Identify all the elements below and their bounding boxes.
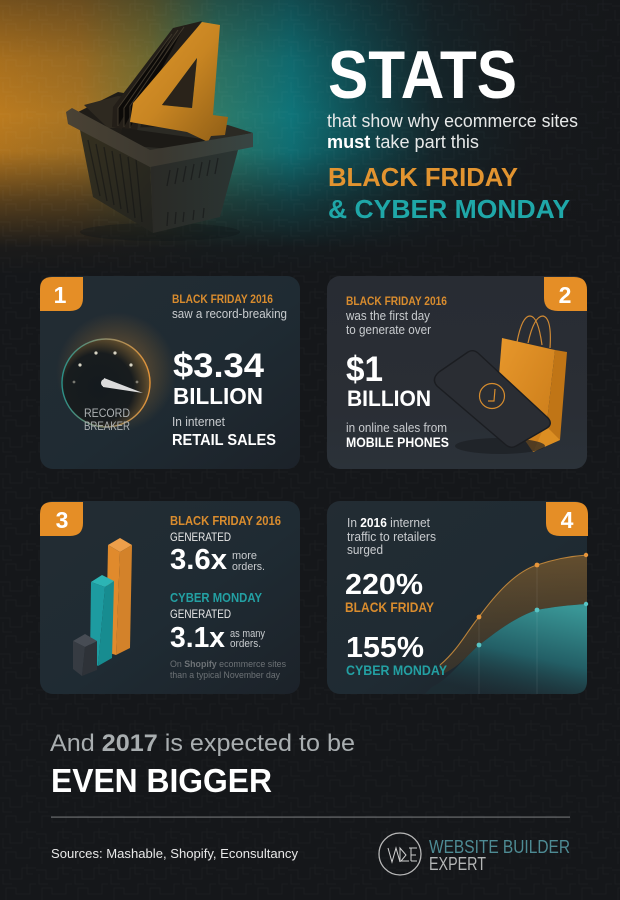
gauge: record breaker: BREAKER (84, 419, 130, 433)
subtitle: that show why ecommerce sites (327, 111, 578, 131)
sources: Sources: Mashable, Shopify, Econsultancy (51, 846, 298, 861)
text block: stat 2 (345, 294, 449, 450)
text block: stat 4: 155% (346, 632, 424, 664)
text block: stat 3: more (232, 550, 257, 562)
text block: stat 3: as many (230, 628, 265, 640)
badge 3 (40, 502, 83, 536)
bar chart (73, 538, 132, 676)
text block: stat 1: RETAIL SALES (172, 432, 276, 449)
logo: website builder expert (379, 833, 570, 875)
text block: stat 1: BILLION (173, 383, 263, 409)
text block: stat 3: GENERATED (170, 607, 231, 621)
badge 4: 4 (561, 507, 574, 533)
text block: stat 2: $1 (346, 350, 383, 389)
panel: stat 3 (40, 501, 300, 694)
closing statement: And 2017 is expected to be (50, 730, 355, 757)
subtitle: must take part this (327, 132, 479, 152)
text block: stat 3: On Shopify ecommerce sites (170, 659, 286, 670)
text block: stat 2: was the first day (345, 308, 430, 323)
text block: stat 1: BLACK FRIDAY 2016 (172, 292, 273, 306)
text block: stat 3: 3.1x (170, 622, 225, 654)
badge 4 (546, 502, 588, 536)
text block: stat 2: to generate over (346, 322, 432, 337)
text block: stat 2: in online sales from (346, 420, 447, 435)
gauge: record breaker (56, 312, 176, 433)
badge 1: 1 (54, 282, 67, 308)
badge 2: 2 (559, 282, 571, 308)
logo: website builder expert: EXPERT (429, 854, 486, 874)
heading: cyber monday: & CYBER MONDAY (328, 194, 570, 224)
text block: stat 3: orders. (230, 638, 261, 650)
text block: stat 1: saw a record-breaking (172, 306, 287, 321)
illustration: shopping bag and phone (434, 316, 567, 454)
panel: stat 4 (327, 501, 588, 694)
illustration: shopping basket with number 4 (66, 21, 253, 241)
text block: stat 3: orders. (232, 561, 265, 573)
text block: stat 4: traffic to retailers (347, 529, 436, 544)
gauge: record breaker: RECORD (84, 406, 130, 420)
text block: stat 4: 220% (345, 569, 423, 601)
text block: stat 4: In 2016 internet (347, 515, 430, 530)
logo: website builder expert: WEBSITE BUILDER (429, 837, 570, 857)
line chart (425, 553, 588, 694)
text block: stat 1: $3.34 (173, 347, 264, 385)
heading: black friday: BLACK FRIDAY (328, 162, 518, 192)
title (327, 37, 578, 224)
text block: stat 4: BLACK FRIDAY (345, 600, 434, 615)
closing statement (50, 730, 355, 799)
text block: stat 3: than a typical November day (170, 670, 280, 681)
text block: stat 2: BILLION (347, 386, 431, 411)
subtitle (327, 111, 578, 152)
badge 2 (544, 277, 587, 311)
heading: stats: STATS (328, 37, 517, 113)
text block: stat 3: 3.6x (170, 544, 227, 576)
panel: stat 2 (327, 276, 587, 469)
text block: stat 4: CYBER MONDAY (346, 663, 447, 678)
text block: stat 3 (170, 513, 286, 681)
text block: stat 2: BLACK FRIDAY 2016 (346, 294, 447, 308)
text block: stat 3: CYBER MONDAY (170, 590, 262, 605)
text block: stat 2: MOBILE PHONES (346, 435, 449, 450)
text block: stat 1: In internet (172, 414, 225, 429)
panel: stat 1 (40, 276, 300, 469)
badge 3: 3 (56, 507, 68, 533)
text block: stat 3: GENERATED (170, 530, 231, 544)
text block: stat 4 (345, 515, 447, 678)
text block: stat 3: BLACK FRIDAY 2016 (170, 513, 281, 528)
text block: stat 1 (172, 292, 287, 449)
closing statement: EVEN BIGGER (51, 762, 272, 799)
text block: stat 4: surged (347, 542, 383, 557)
badge 1 (40, 277, 83, 311)
